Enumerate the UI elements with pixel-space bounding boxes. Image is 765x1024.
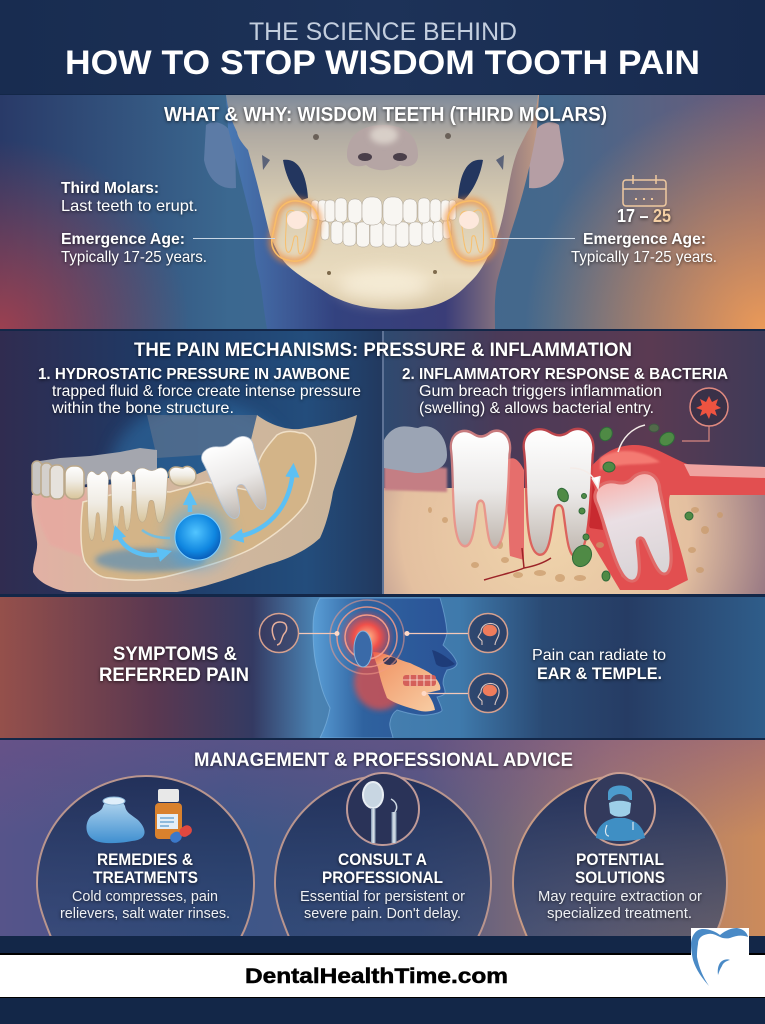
right text block: Emergence Age:	[583, 231, 706, 248]
card text: relievers, salt water rinses.	[60, 905, 230, 922]
icon: jaw callout	[422, 674, 508, 712]
card text: Essential for persistent or	[300, 888, 465, 905]
text block: inflammatory response: Gum breach triggers inflammation	[419, 383, 662, 400]
heading: symptoms	[99, 644, 249, 686]
illustration: pressure arrows and fluid ball	[117, 470, 293, 569]
card text	[538, 851, 702, 922]
panel: pain mechanisms right	[384, 329, 765, 594]
card text: TREATMENTS	[93, 869, 198, 887]
illustration: jawbone	[32, 415, 357, 592]
card: solutions	[513, 773, 727, 937]
left text block	[61, 180, 207, 266]
left text block: Emergence Age:	[61, 231, 185, 248]
illustration: adjacent teeth	[384, 426, 592, 555]
age range: 17 – 25	[617, 206, 671, 226]
illustration: bone and gum	[384, 445, 765, 594]
illustration: head profile	[313, 598, 457, 738]
card text: POTENTIAL	[576, 851, 664, 869]
right text block	[571, 231, 717, 266]
card text	[60, 851, 230, 922]
logo: tooth	[691, 928, 749, 986]
icon: temple callout	[404, 614, 508, 652]
panel divider	[382, 331, 384, 594]
footer band	[0, 953, 765, 998]
header subtitle: THE SCIENCE BEHIND	[249, 18, 517, 46]
panel: symptoms and referred pain	[0, 594, 765, 738]
illustration: ghost upper jaw	[33, 415, 257, 495]
text block: hydrostatic pressure	[38, 366, 361, 417]
text block: radiating pain	[532, 647, 666, 683]
left text block: Last teeth to erupt.	[61, 198, 198, 215]
icon: inflammation	[682, 388, 728, 441]
header band	[0, 0, 765, 94]
right text block: Typically 17-25 years.	[571, 249, 717, 266]
left text block: Third Molars:	[61, 180, 159, 197]
card: consult	[275, 773, 491, 937]
illustration: impacted wisdom tooth	[201, 436, 266, 519]
arrow: bacterial entry	[570, 425, 645, 488]
illustration: head and jaw	[204, 95, 564, 329]
icon: dental tools	[347, 773, 419, 845]
card text: REMEDIES &	[97, 851, 193, 869]
card text: severe pain. Don't delay.	[304, 905, 461, 922]
heading: management: MANAGEMENT & PROFESSIONAL ADVICE	[194, 750, 573, 771]
heading: symptoms: SYMPTOMS &	[113, 644, 237, 665]
illustration: bacteria	[556, 424, 693, 581]
icon: glowing left wisdom tooth	[268, 197, 322, 265]
illustration: front teeth	[311, 197, 456, 247]
website name: DentalHealthTime.com	[245, 965, 508, 988]
left text block: Typically 17-25 years.	[61, 249, 207, 266]
icon: capsule	[170, 825, 192, 843]
text block: inflammatory response: (swelling) & allows bacterial entry.	[419, 400, 654, 417]
card: remedies	[37, 776, 254, 937]
panel: management and advice	[0, 737, 765, 937]
text block: hydrostatic pressure: trapped fluid & force create intense pressure	[52, 383, 361, 400]
card text: Cold compresses, pain	[72, 888, 218, 905]
text block: inflammatory response: 2. INFLAMMATORY RESPONSE & BACTERIA	[402, 366, 728, 383]
icon: glowing right wisdom tooth	[444, 197, 498, 265]
icon: calendar	[623, 175, 666, 206]
icon: surgeon	[585, 773, 655, 845]
text block: radiating pain: EAR & TEMPLE.	[537, 664, 662, 683]
card text: PROFESSIONAL	[322, 869, 443, 887]
text block: hydrostatic pressure: within the bone structure.	[51, 400, 234, 417]
panel heading: WHAT & WHY: WISDOM TEETH (THIRD MOLARS)	[164, 104, 607, 126]
card text: May require extraction or	[538, 888, 702, 905]
card text: SOLUTIONS	[575, 869, 665, 887]
heading: symptoms: REFERRED PAIN	[99, 665, 249, 686]
callout lines	[193, 238, 575, 239]
panel heading: pain mechanisms: THE PAIN MECHANISMS: PRESSURE & INFLAMMATION	[134, 340, 632, 361]
icon: ice pack	[86, 797, 145, 843]
panel: what and why	[0, 95, 765, 329]
illustration: impacted red tooth	[594, 471, 680, 585]
card text: specialized treatment.	[547, 905, 692, 922]
text block: radiating pain: Pain can radiate to	[532, 647, 666, 664]
card text	[300, 851, 465, 922]
main title: HOW TO STOP WISDOM TOOTH PAIN	[65, 44, 700, 82]
illustration: lower teeth row	[32, 461, 196, 541]
text block: hydrostatic pressure: 1. HYDROSTATIC PRESSURE IN JAWBONE	[38, 366, 350, 383]
text block: inflammatory response	[402, 366, 728, 417]
panel: pain mechanisms left	[0, 329, 383, 594]
icon: ear callout	[260, 614, 340, 652]
card text: CONSULT A	[338, 851, 427, 869]
icon: medicine bottle	[155, 789, 182, 839]
